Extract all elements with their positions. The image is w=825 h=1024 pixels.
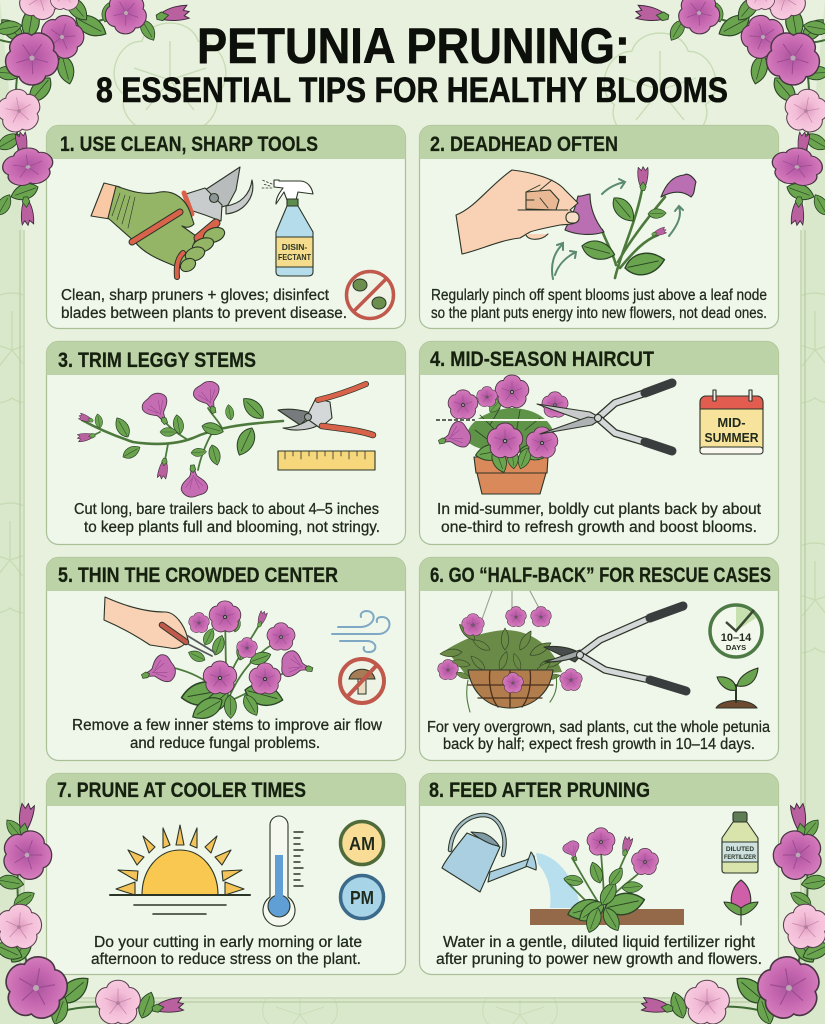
icon: soil: [530, 909, 684, 925]
text 3: [74, 501, 380, 536]
text 5: and reduce fungal problems.: [130, 735, 320, 752]
floral corner: top left: [0, 0, 190, 226]
icon: AM badge: AM: [349, 834, 375, 854]
icon: flower bud: [724, 880, 758, 925]
title: 8 ESSENTIAL TIPS FOR HEALTHY BLOOMS: [96, 71, 728, 110]
icon: calendar mid-summer: [700, 390, 763, 454]
title: [96, 18, 728, 110]
icon: disinfectant spray bottle: [262, 180, 313, 276]
icon: fertilizer bottle: DILUTED: [726, 846, 754, 853]
icon: pruners: [278, 384, 373, 435]
floral corner: top right: [635, 0, 825, 226]
text 8: after pruning to power new growth and flowers.: [436, 951, 762, 968]
panel: 8 feed after pruning: [420, 774, 778, 974]
text 7: afternoon to reduce stress on the plant.: [91, 951, 361, 968]
text 5: Remove a few inner stems to improve air flow: [72, 717, 383, 734]
panel: 4 mid-season haircut: [420, 342, 778, 544]
title background texture: [114, 23, 716, 143]
heading 4: 4. MID-SEASON HAIRCUT: [430, 348, 654, 371]
icon: fertilized plant: [561, 828, 658, 935]
icon: hanging basket: [438, 591, 582, 712]
text 7: [91, 934, 362, 968]
icon: thermometer: [263, 816, 303, 926]
icon: clock 10-14 days: 10–14: [721, 632, 752, 644]
heading 1: 1. USE CLEAN, SHARP TOOLS: [60, 133, 318, 156]
icon: petunia bush: [137, 601, 316, 724]
icon: ruler: [278, 451, 375, 470]
icon: PM badge: PM: [350, 888, 374, 908]
text 1: [61, 287, 347, 322]
text 2: [431, 287, 767, 322]
text 6: back by half; expect fresh growth in 10–14 days.: [443, 736, 755, 753]
text 4: one-third to refresh growth and boost blooms.: [441, 519, 757, 536]
icon: leggy stem with flowers: [77, 378, 283, 498]
icon: fertilizer bottle: FERTILIZER: [724, 854, 756, 861]
heading 2: 2. DEADHEAD OFTEN: [430, 133, 618, 156]
text 7: Do your cutting in early morning or late: [94, 934, 362, 951]
text 1: blades between plants to prevent disease.: [61, 305, 347, 322]
floral corner: bottom left: [0, 802, 185, 1024]
panel: 2 deadhead often: [420, 126, 778, 328]
text 3: to keep plants full and blooming, not stringy.: [84, 519, 380, 536]
icon: AM badge: [340, 822, 384, 864]
floral corner: bottom right: [640, 802, 825, 1024]
icon: clock 10-14 days: DAYS: [726, 643, 746, 652]
icon: gloved hand with pruners: [91, 167, 253, 277]
text 2: so the plant puts energy into new flowers, not dead ones.: [431, 305, 767, 322]
heading 7: 7. PRUNE AT COOLER TIMES: [57, 779, 306, 802]
text 4: [437, 501, 762, 536]
icon: clock 10-14 days: [710, 605, 762, 657]
icon: water stream: [536, 853, 580, 908]
text 8: Water in a gentle, diluted liquid fertilizer right: [443, 934, 756, 951]
text 6: [427, 719, 770, 753]
text 6: For very overgrown, sad plants, cut the whole petunia: [427, 719, 770, 736]
icon: hand pinching: [456, 170, 579, 254]
icon: loppers: [544, 606, 686, 691]
icon: calendar mid-summer: MID-: [717, 415, 746, 430]
icon: fertilizer bottle: [722, 812, 758, 873]
icon: watering can: [442, 815, 536, 892]
text 3: Cut long, bare trailers back to about 4–5 inches: [74, 501, 379, 518]
icon: sunrise: [110, 825, 250, 914]
icon: calendar mid-summer: SUMMER: [704, 430, 759, 445]
text 5: [72, 717, 383, 752]
icon: no fungus: [340, 659, 384, 703]
icon: PM badge: [340, 876, 384, 918]
icon: seedling: [716, 668, 758, 708]
heading 8: 8. FEED AFTER PRUNING: [429, 779, 650, 802]
title: PETUNIA PRUNING:: [197, 18, 630, 74]
panel: 5 thin the crowded center: [46, 558, 406, 760]
icon: hedge shears: [537, 383, 672, 451]
background pattern: [0, 293, 825, 1024]
icon: hand with snips: [104, 597, 214, 656]
heading 5: 5. THIN THE CROWDED CENTER: [58, 564, 338, 587]
icon: no disease: [346, 272, 394, 318]
text 1: Clean, sharp pruners + gloves; disinfect: [61, 287, 330, 304]
icon: potted petunia: [434, 375, 568, 494]
icon: disinfectant spray bottle: DISIN-: [282, 242, 307, 252]
heading 3: 3. TRIM LEGGY STEMS: [58, 349, 256, 372]
panel: 3 trim leggy stems: [46, 342, 406, 544]
text 8: [436, 934, 762, 968]
panel: 6 go half-back: [420, 558, 778, 760]
panel: 1 use clean sharp tools: [46, 126, 406, 328]
panel: 7 prune at cooler times: [46, 774, 406, 974]
icon: wind: [332, 611, 389, 652]
text 4: In mid-summer, boldly cut plants back by about: [437, 501, 762, 518]
icon: growth arrows: [552, 179, 683, 279]
icon: disinfectant spray bottle: FECTANT: [278, 252, 312, 262]
text 2: Regularly pinch off spent blooms just above a leaf node: [431, 287, 767, 304]
icon: plant stems: [565, 167, 696, 278]
